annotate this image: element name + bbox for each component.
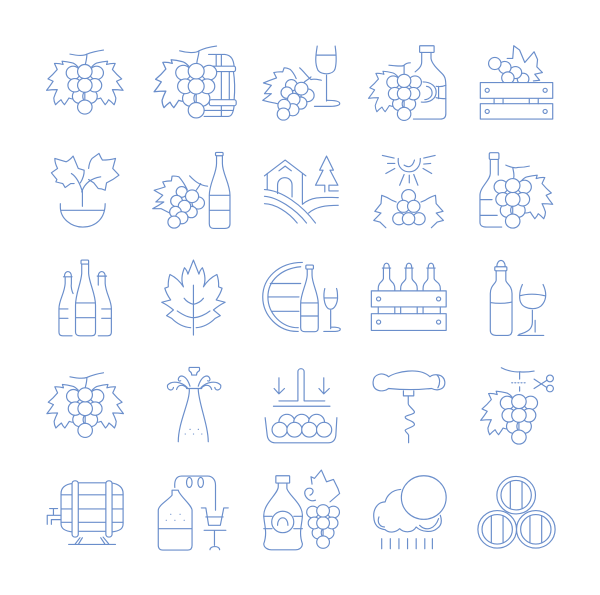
icon: crate of bottles bbox=[371, 263, 446, 330]
icon: vine leaf bbox=[162, 260, 225, 335]
icon: wine bottle and grapes bbox=[480, 153, 553, 228]
icon: sun over grapes bbox=[374, 155, 443, 228]
icon: barrel, bottle and glass bbox=[263, 262, 340, 332]
icon: vine seedling in soil bbox=[51, 153, 119, 227]
icon: three bottles bbox=[59, 260, 111, 336]
icon: crate of grapes bbox=[480, 46, 553, 119]
icon: grape bunch with leaves, second bbox=[47, 373, 123, 437]
icon: three stacked barrels bbox=[478, 476, 555, 548]
icon: corkscrew bbox=[373, 371, 445, 443]
icon: fermentation carboy with airlock bbox=[158, 476, 228, 550]
icon: grape bunch with leaves bbox=[47, 50, 123, 114]
icon: vineyard house and tree bbox=[264, 156, 338, 223]
icon: grapes and barrel bbox=[154, 46, 236, 118]
icon: grape press bbox=[265, 369, 337, 443]
icon: grapes and champagne bottle bbox=[153, 152, 230, 228]
icon: champagne bottle popping bbox=[167, 367, 221, 442]
icon: liqueur bottle and grapes bbox=[264, 470, 340, 550]
icon: scissors cutting grapes bbox=[481, 368, 553, 444]
icon: barrel with tap bbox=[47, 481, 123, 544]
icon: bottle and wine glass bbox=[490, 260, 546, 335]
icon: grapes and cognac bottle bbox=[369, 46, 446, 120]
icon: grapes and wine glass bbox=[263, 46, 340, 120]
icon: rain cloud and sun bbox=[374, 476, 446, 549]
